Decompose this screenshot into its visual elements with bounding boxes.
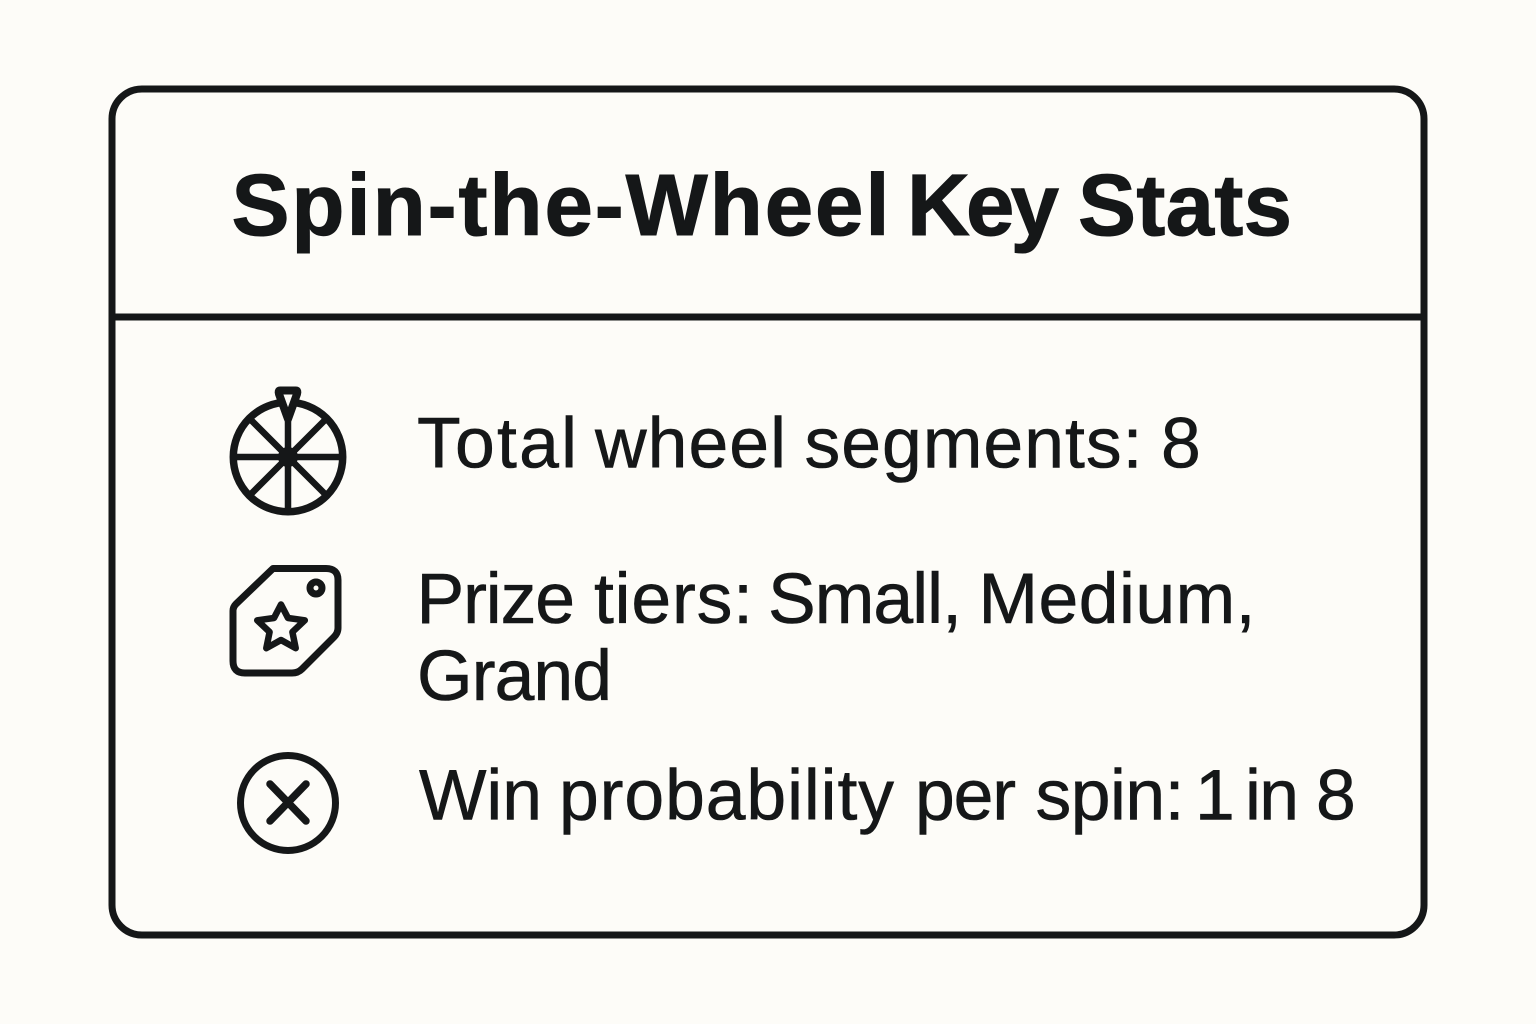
icon: prize tag with star: [233, 568, 338, 673]
icon: circled x: [240, 756, 336, 850]
stat: total wheel segments: 8: [1161, 404, 1201, 484]
stat: win probability: 8: [1316, 756, 1356, 836]
stat: prize tiers: Grand: [417, 636, 612, 716]
title: [232, 157, 1292, 254]
stat: prize tiers: Prize: [416, 559, 575, 639]
stat: win probability: 1: [1195, 756, 1235, 836]
stat: total wheel segments: Total: [417, 404, 577, 484]
stat: win probability: spin:: [1036, 756, 1184, 836]
stat: win probability: per: [915, 756, 1016, 836]
title: Key: [907, 157, 1059, 254]
title: Stats: [1078, 157, 1292, 254]
stat: total wheel segments: [417, 404, 1201, 484]
stat: total wheel segments: segments:: [804, 404, 1142, 484]
stat: win probability: in: [1245, 756, 1299, 836]
stat: win probability: probability: [559, 756, 894, 836]
stat: prize tiers: tiers:: [594, 559, 753, 639]
stat: prize tiers: Small,: [768, 559, 962, 639]
stat: prize tiers: [416, 559, 1256, 716]
stat: total wheel segments: wheel: [594, 404, 786, 484]
stat: win probability: Win: [419, 756, 542, 836]
stat: prize tiers: Medium,: [978, 559, 1256, 639]
title: Spin-the-Wheel: [232, 157, 890, 254]
stat: win probability: [419, 756, 1356, 836]
panel: key stats card: [112, 89, 1424, 935]
icon: prize wheel: [233, 390, 343, 512]
